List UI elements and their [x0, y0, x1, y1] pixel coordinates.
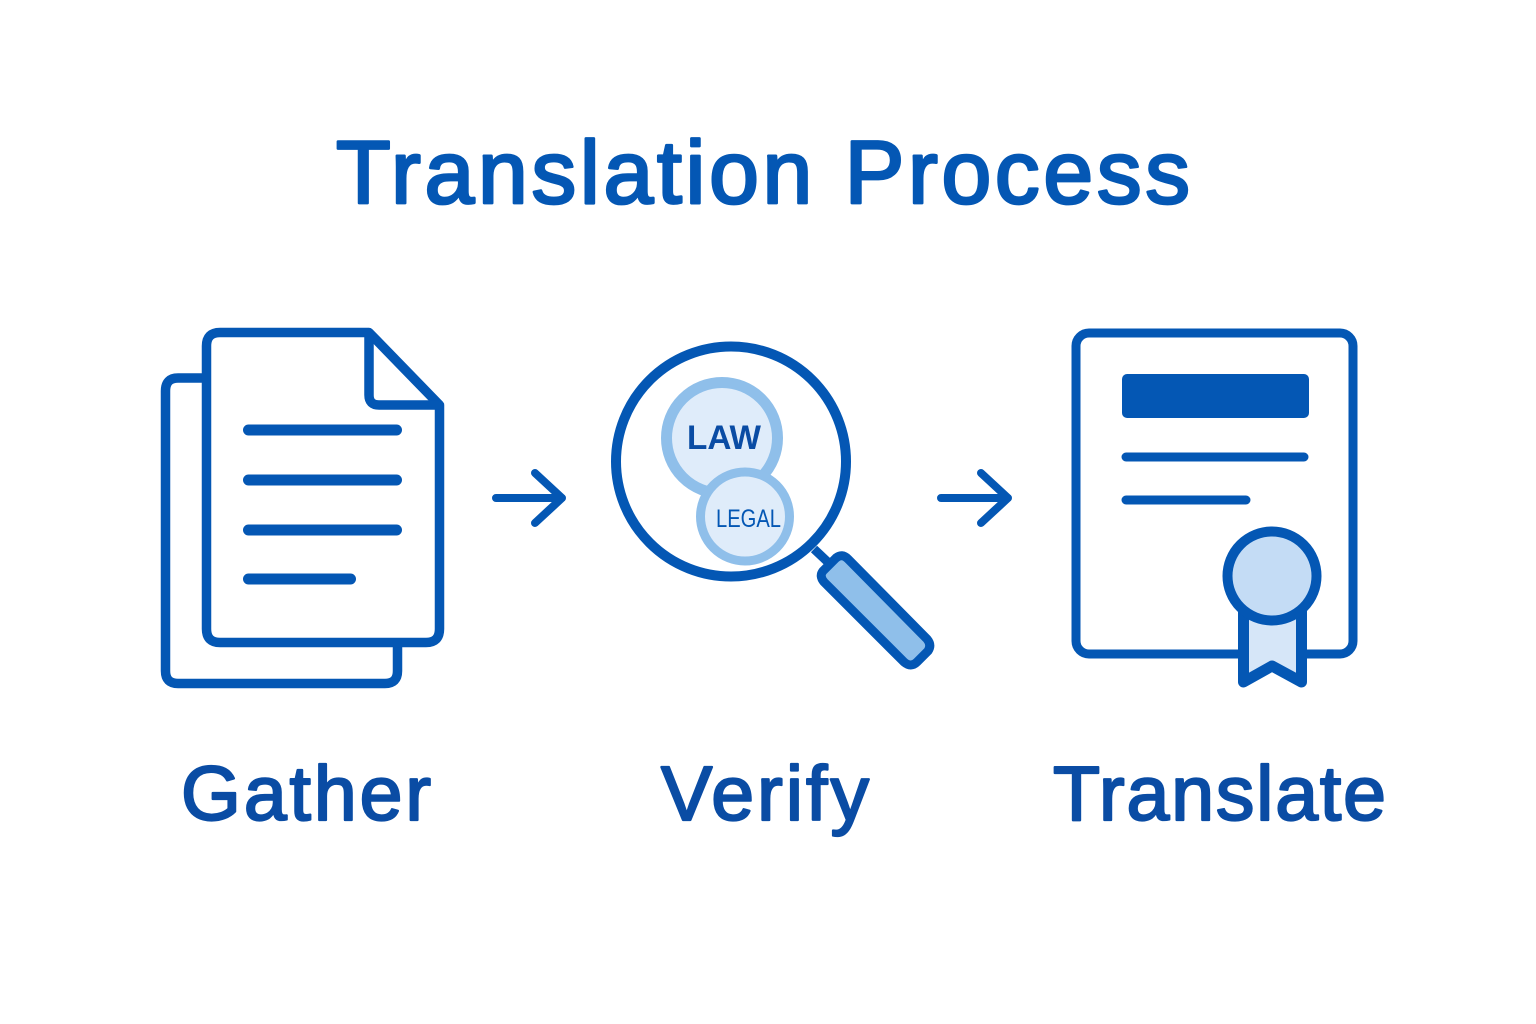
icon: certified translation [1076, 333, 1353, 682]
LEGAL bubble: LEGAL [716, 505, 781, 533]
text lines [1126, 457, 1304, 500]
label: Gather: Gather [181, 751, 431, 837]
seal [1228, 532, 1316, 620]
heading bar [1122, 374, 1309, 418]
lens ring [616, 346, 846, 576]
back page [166, 378, 398, 684]
handle [814, 549, 930, 665]
certificate page [1076, 333, 1353, 654]
text lines [248, 430, 396, 579]
icon: magnifying glass [616, 346, 930, 665]
arrow: verify to translate [941, 473, 1008, 523]
icon: gather documents [166, 332, 440, 684]
LEGAL bubble [700, 472, 790, 561]
LAW bubble [666, 382, 778, 494]
title: Translation Process [336, 122, 1190, 222]
arrow: gather to verify [496, 473, 562, 523]
label: Verify: Verify [661, 751, 870, 837]
label: Translate: Translate [1053, 751, 1386, 837]
page fold [369, 335, 439, 405]
front page [206, 332, 440, 642]
LAW bubble: LAW [687, 419, 761, 457]
ribbon [1244, 610, 1302, 682]
